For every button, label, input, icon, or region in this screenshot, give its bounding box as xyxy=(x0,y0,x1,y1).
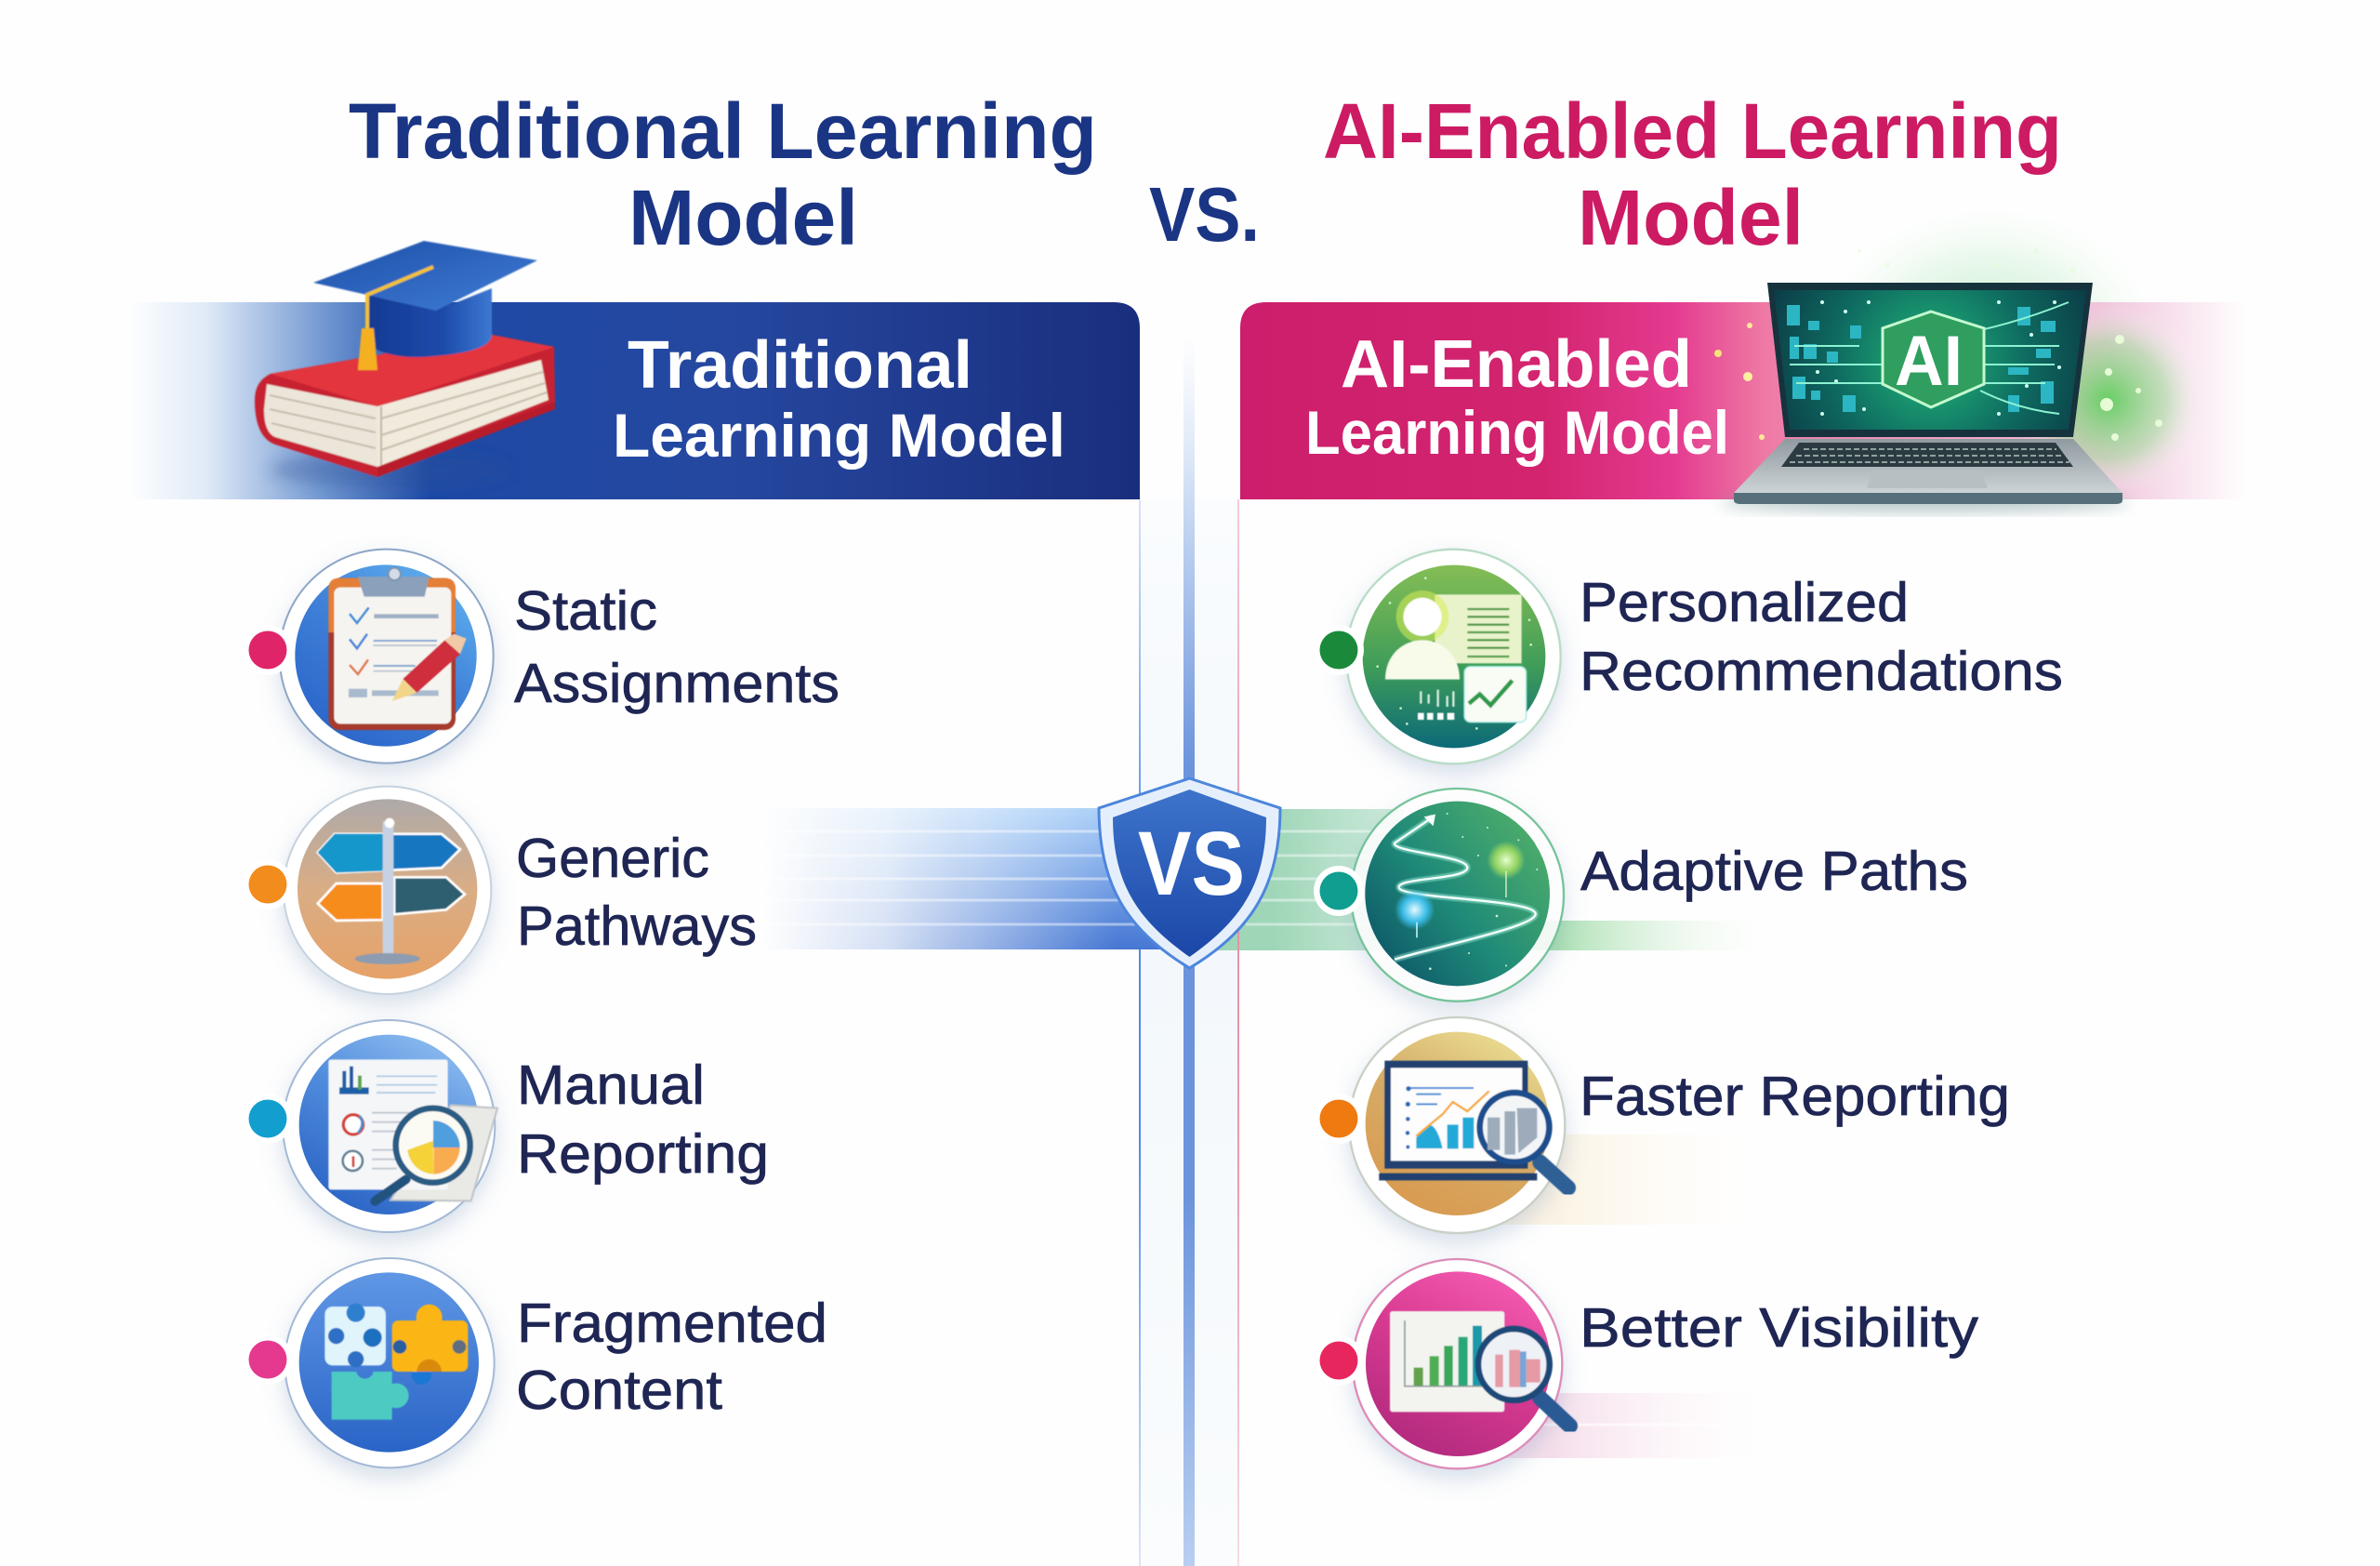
dot: orange xyxy=(243,859,293,909)
panel: AI-enabled banner xyxy=(1240,302,2250,499)
panel: AI-enabled items xyxy=(1314,550,2063,1468)
item: faster reporting xyxy=(1314,1017,2010,1233)
dot: pink xyxy=(243,625,293,675)
label: faster reporting: Faster Reporting xyxy=(1580,1066,2010,1127)
item: adaptive paths xyxy=(1314,789,1968,1002)
item: better visibility xyxy=(1314,1259,1979,1468)
icon: chart with magnifier xyxy=(1353,1259,1570,1468)
icon: VS shield xyxy=(1099,778,1280,968)
centre divider xyxy=(1139,335,1238,1566)
label: manual reporting: Manual xyxy=(517,1055,705,1116)
panel: traditional items xyxy=(243,550,840,1467)
label: manual reporting xyxy=(517,1055,769,1185)
label: personalized recommendations xyxy=(1580,572,2063,702)
dot: blue xyxy=(243,1094,293,1144)
panel: traditional banner: Traditional xyxy=(628,328,972,403)
icon: adaptive path xyxy=(1351,789,1564,1002)
icon: laptop: AI xyxy=(1895,322,1963,401)
label: static assignments xyxy=(514,580,840,714)
icon: graduation cap on book xyxy=(255,241,555,488)
icon: laptop analytics xyxy=(1349,1017,1568,1233)
label: generic pathways: Generic xyxy=(516,828,709,889)
icon: laptop xyxy=(1720,283,2129,511)
item: manual reporting xyxy=(243,1020,769,1232)
panel: AI-enabled banner: Learning Model xyxy=(1305,398,1729,467)
label: personalized recommendations: Recommendations xyxy=(1580,641,2063,702)
icon: clipboard xyxy=(280,550,494,763)
item: personalized recommendations xyxy=(1314,550,2063,763)
label: fragmented content: Content xyxy=(516,1360,722,1421)
title: AI-enabled: Model xyxy=(1578,174,1804,261)
icon: signpost xyxy=(284,787,491,994)
label: static assignments: Assignments xyxy=(514,653,840,714)
dot: red-pink xyxy=(1314,1335,1364,1386)
label: better visibility: Better Visibility xyxy=(1580,1297,1979,1359)
label: fragmented content xyxy=(516,1293,827,1421)
title: VS.: VS. xyxy=(1149,171,1260,258)
label: generic pathways: Pathways xyxy=(517,896,757,957)
panel: traditional banner: Learning Model xyxy=(613,401,1065,470)
dot: teal xyxy=(1314,866,1364,916)
dot: orange xyxy=(1314,1094,1364,1144)
label: fragmented content: Fragmented xyxy=(517,1293,827,1354)
icon: report with magnifier xyxy=(283,1020,497,1232)
label: personalized recommendations: Personalized xyxy=(1580,572,1909,633)
dot: green xyxy=(1314,625,1364,675)
icon: puzzle xyxy=(284,1258,495,1467)
item: static assignments xyxy=(243,550,840,763)
title: traditional: Traditional Learning xyxy=(349,87,1097,175)
title: traditional xyxy=(349,87,1097,261)
item: fragmented content xyxy=(243,1258,827,1467)
label: generic pathways xyxy=(516,828,757,957)
comparison stripes right xyxy=(1190,499,1766,1566)
icon: VS shield: VS xyxy=(1138,813,1245,914)
title: AI-enabled xyxy=(1323,87,2171,474)
panel: AI-enabled banner: AI-Enabled xyxy=(1341,327,1692,402)
comparison stripes left xyxy=(787,808,1160,949)
icon: AI particles xyxy=(1714,248,2162,441)
label: static assignments: Static xyxy=(514,580,657,642)
panel: traditional banner xyxy=(126,302,1140,499)
label: manual reporting: Reporting xyxy=(517,1123,769,1185)
icon: personalized profile xyxy=(1346,550,1561,763)
title: traditional: Model xyxy=(628,174,858,261)
label: adaptive paths: Adaptive Paths xyxy=(1580,841,1968,902)
title: AI-enabled: AI-Enabled Learning xyxy=(1323,87,2062,175)
item: generic pathways xyxy=(243,787,757,994)
dot: magenta xyxy=(243,1334,293,1385)
